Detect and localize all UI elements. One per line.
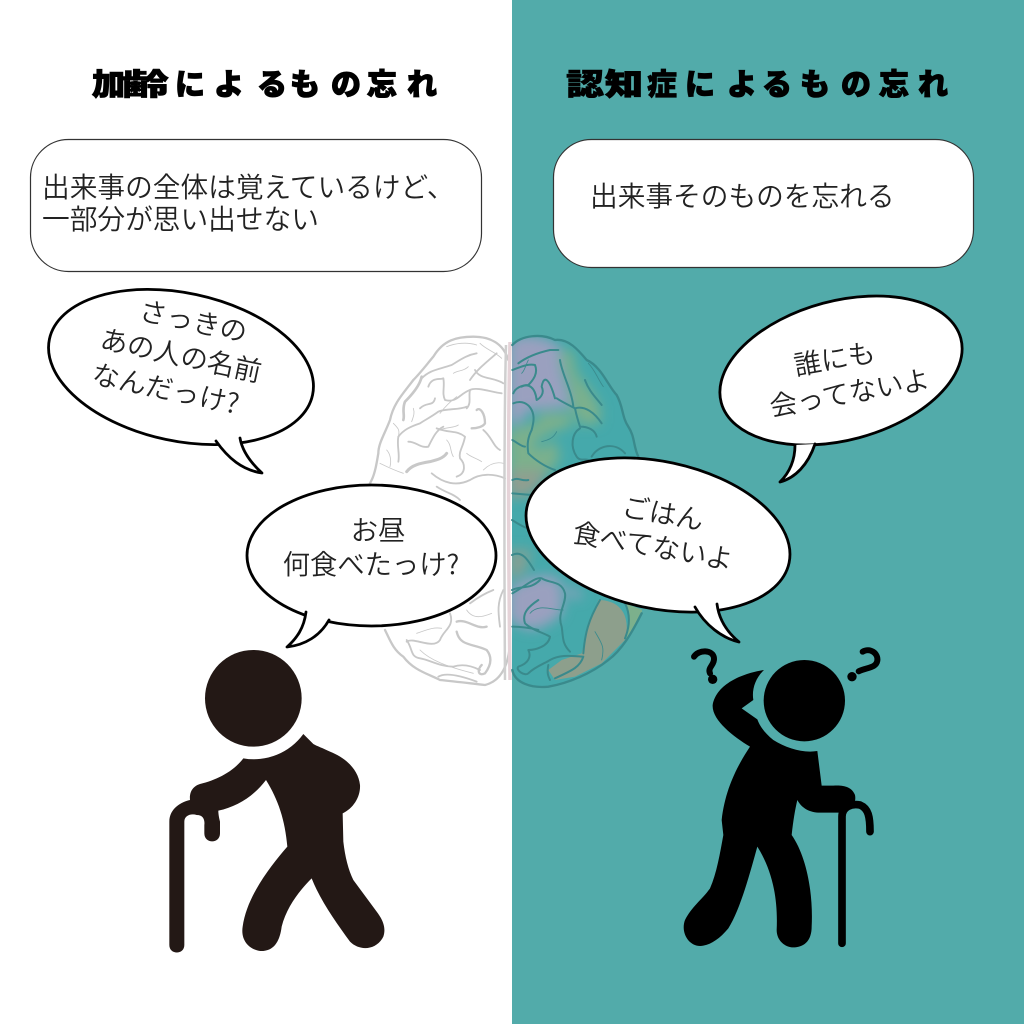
speech bubble: name forgotten: あの人の名前 [97,317,266,390]
brain: colour regions [508,335,643,680]
title: right: 認 [566,60,604,104]
icon: question mark right [847,650,877,681]
icon: brain left half [367,337,509,685]
text box: left description [30,140,482,272]
title: left: る [257,60,287,104]
speech bubble: name forgotten [34,267,328,473]
brain: base fill [512,335,642,687]
brain region: brown lower-middle [508,550,532,580]
icon: cane [842,805,870,943]
title: left: よ [214,60,244,104]
text box: right description: 出来事そのものを忘れる [590,174,895,214]
title: left: の [331,60,361,104]
panel: right background [512,0,1024,1024]
title: right: よ [727,60,757,104]
title: left: 齢 [122,60,169,104]
speech bubble: no meal: ごはん [619,484,707,538]
brain region: brown occipital [548,600,627,680]
title: right: 症 [647,60,677,104]
panel: left background [0,0,512,1024]
title: left [92,60,437,104]
title: left: 加 [92,60,125,104]
speech bubble: nobody met: 会ってないよ [766,357,932,424]
title: right: 忘 [879,60,909,104]
title: left: に [175,60,205,104]
title: right: れ [918,60,948,104]
brain region: purple bottom [508,576,563,629]
speech bubble: nobody met [703,271,979,482]
title: left: 忘 [367,60,397,104]
icon: elderly person right with question marks [684,650,877,947]
speech bubble: no meal [512,435,804,642]
brain region: purple top [508,335,570,425]
title: right: 知 [605,60,643,104]
icon: brain right half [508,335,643,687]
title: right: る [762,60,792,104]
text box: left description: 一部分が思い出せない [42,197,319,237]
speech bubble: name forgotten: なんだっけ? [89,352,243,422]
brain region: green top [508,350,600,473]
brain: middle folds [512,520,540,590]
title: right: に [685,60,715,104]
text box: right description [554,140,974,268]
title: left: れ [407,60,437,104]
title: right: の [841,60,871,104]
speech bubble: no meal: 食べてないよ [570,510,737,578]
speech bubble: name forgotten: さっきの [136,288,251,350]
title: right: も [800,60,830,104]
icon: brain midline [504,342,510,680]
speech bubble: lunch: 何食べたっけ? [283,542,459,582]
icon: elderly person left [169,650,384,952]
title: left: も [290,60,320,104]
speech bubble: lunch [247,485,496,647]
brain region: green occipital [625,603,643,640]
icon: question mark left [694,651,717,684]
speech bubble: nobody met: 誰にも [790,330,878,383]
brain region: purple small [565,583,585,598]
text box: left description: 出来事の全体は覚えているけど、 [42,165,455,205]
speech bubble: lunch: お昼 [351,508,405,548]
brain region: brown middle [508,470,548,498]
title: right [566,60,948,104]
